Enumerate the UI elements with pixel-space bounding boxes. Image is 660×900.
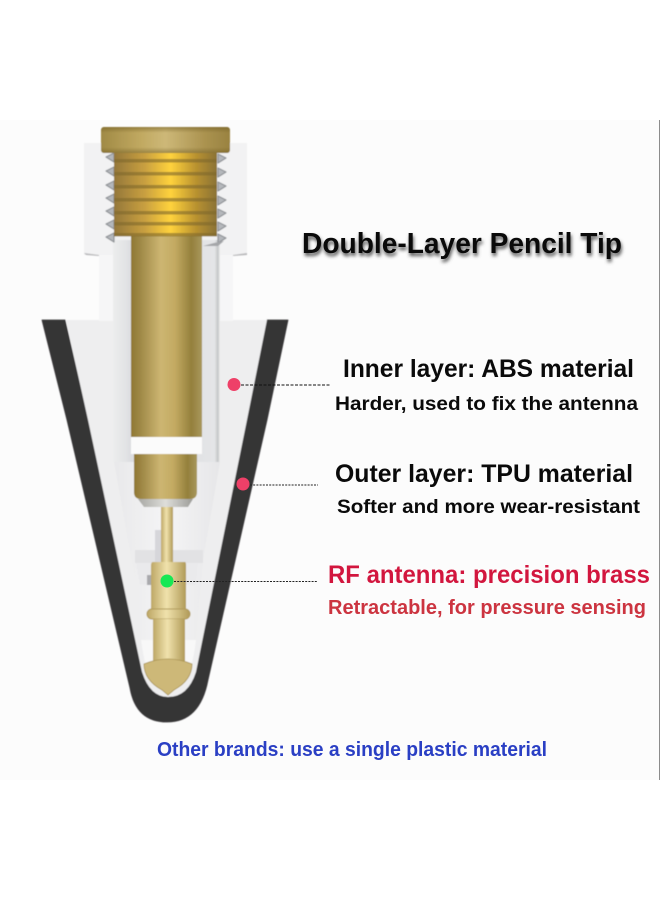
image background panel bbox=[0, 120, 659, 780]
brass threaded section bbox=[114, 152, 217, 236]
note: other brands: Other brands: use a single plastic material bbox=[157, 739, 547, 761]
callout: outer layer bbox=[236, 478, 318, 490]
leader line bbox=[250, 484, 318, 486]
label: RF antenna heading: RF antenna: precision brass bbox=[328, 561, 650, 589]
brass head bbox=[101, 127, 230, 153]
outer layer: dark TPU shell bbox=[42, 320, 288, 722]
label: RF antenna description: Retractable, for pressure sensing bbox=[328, 597, 646, 619]
clear tube bbox=[113, 240, 220, 462]
antenna tip bbox=[144, 659, 192, 695]
antenna body bbox=[151, 562, 186, 612]
marker dot bbox=[236, 478, 250, 490]
inner cavity step bbox=[135, 550, 203, 563]
title: Double-Layer Pencil Tip bbox=[303, 231, 623, 263]
label: inner layer heading: Inner layer: ABS material bbox=[343, 355, 634, 383]
title: Double-Layer Pencil Tip bbox=[302, 228, 622, 260]
leader line bbox=[241, 384, 331, 386]
gray guide block bbox=[155, 530, 163, 562]
threads of the collar bbox=[106, 153, 226, 243]
inner layer: ABS body bbox=[66, 320, 267, 697]
right edge rule bbox=[659, 120, 660, 780]
label: inner layer description: Harder, used to fix the antenna bbox=[335, 394, 638, 415]
callout: RF antenna bbox=[160, 574, 317, 588]
collar lips bbox=[84, 253, 247, 256]
lower brass cylinder bbox=[134, 454, 197, 499]
tip cavity bbox=[141, 640, 196, 692]
collar neck bbox=[99, 255, 233, 321]
small silver clip bbox=[147, 575, 152, 585]
brass shaft bbox=[131, 234, 202, 438]
leader line bbox=[174, 580, 317, 582]
diagram: pencil tip cross-section bbox=[42, 127, 288, 722]
inner cavity bbox=[114, 462, 220, 692]
callout: inner layer bbox=[228, 378, 331, 391]
tube top silver lip bbox=[203, 241, 224, 246]
white seal ring bbox=[131, 437, 202, 454]
marker dot bbox=[228, 378, 240, 391]
antenna pin bbox=[161, 507, 173, 563]
upper collar bbox=[84, 143, 247, 255]
marker dot bbox=[160, 574, 174, 588]
silver base bbox=[138, 499, 193, 507]
lower side step bbox=[136, 563, 198, 585]
label: outer layer description: Softer and more wear-resistant bbox=[337, 497, 641, 518]
antenna ring bbox=[147, 609, 190, 619]
label: outer layer heading: Outer layer: TPU material bbox=[335, 460, 633, 488]
antenna lower body bbox=[153, 619, 185, 661]
